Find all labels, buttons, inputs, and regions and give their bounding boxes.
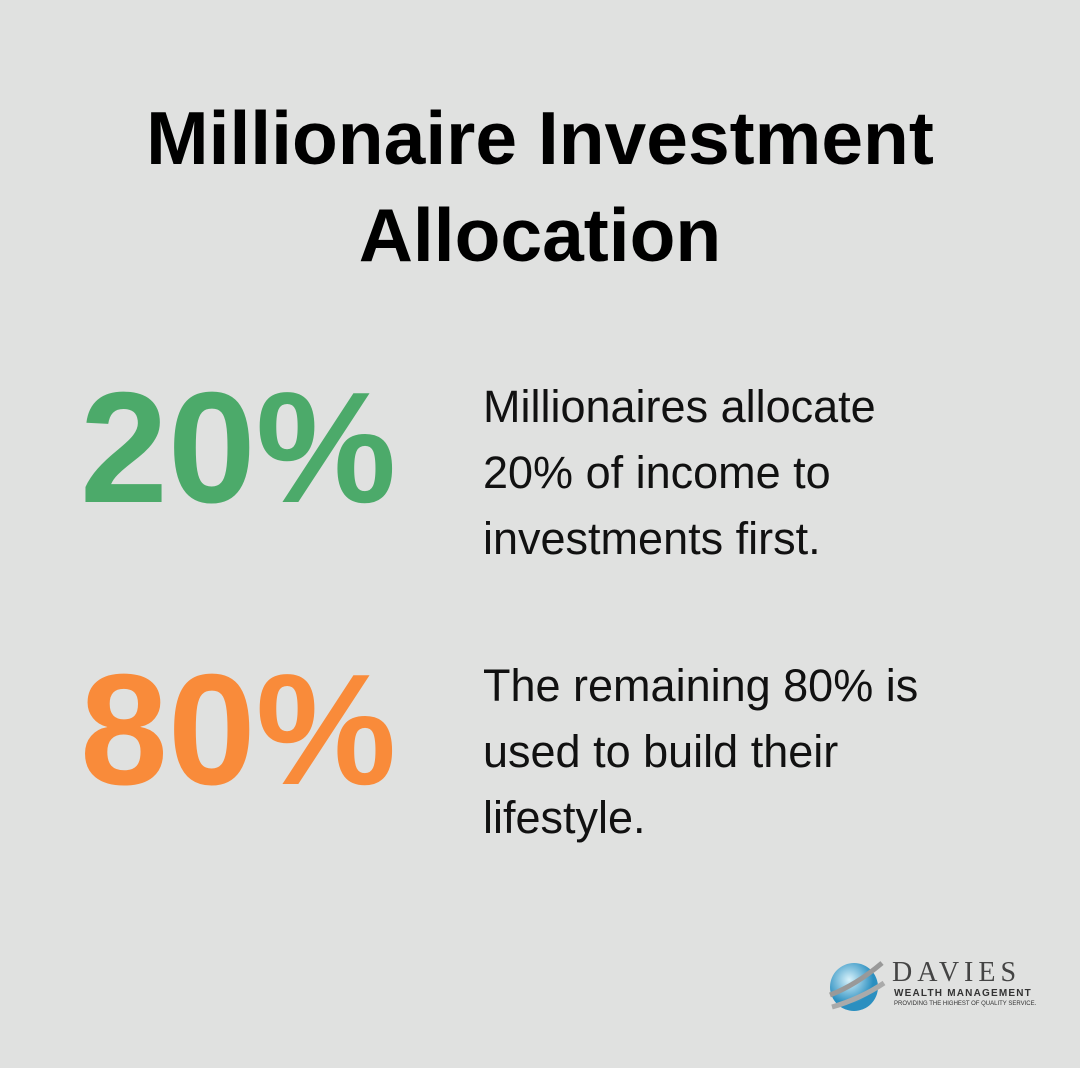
text: 20% description: investments first. xyxy=(483,513,821,564)
text: 80% description: used to build their xyxy=(483,726,838,777)
title: Allocation xyxy=(359,193,721,277)
text: 80% description xyxy=(483,660,918,843)
logo: WEALTH MANAGEMENT xyxy=(894,988,1032,999)
logo: PROVIDING THE HIGHEST OF QUALITY SERVICE. xyxy=(894,1001,1036,1007)
title: Millionaire Investment xyxy=(146,96,934,180)
text: 20% description xyxy=(483,381,876,564)
text: 20% description: 20% of income to xyxy=(483,447,831,498)
text: 80% description: lifestyle. xyxy=(483,792,646,843)
logo text: DAVIES xyxy=(892,957,1021,988)
text: 80% description: The remaining 80% is xyxy=(483,660,918,711)
stat: 20%: 20% xyxy=(80,360,396,536)
title xyxy=(146,96,934,277)
stat: 80%: 80% xyxy=(80,642,396,818)
logo xyxy=(829,957,1036,1011)
text: 20% description: Millionaires allocate xyxy=(483,381,876,432)
icon: globe xyxy=(829,961,886,1011)
